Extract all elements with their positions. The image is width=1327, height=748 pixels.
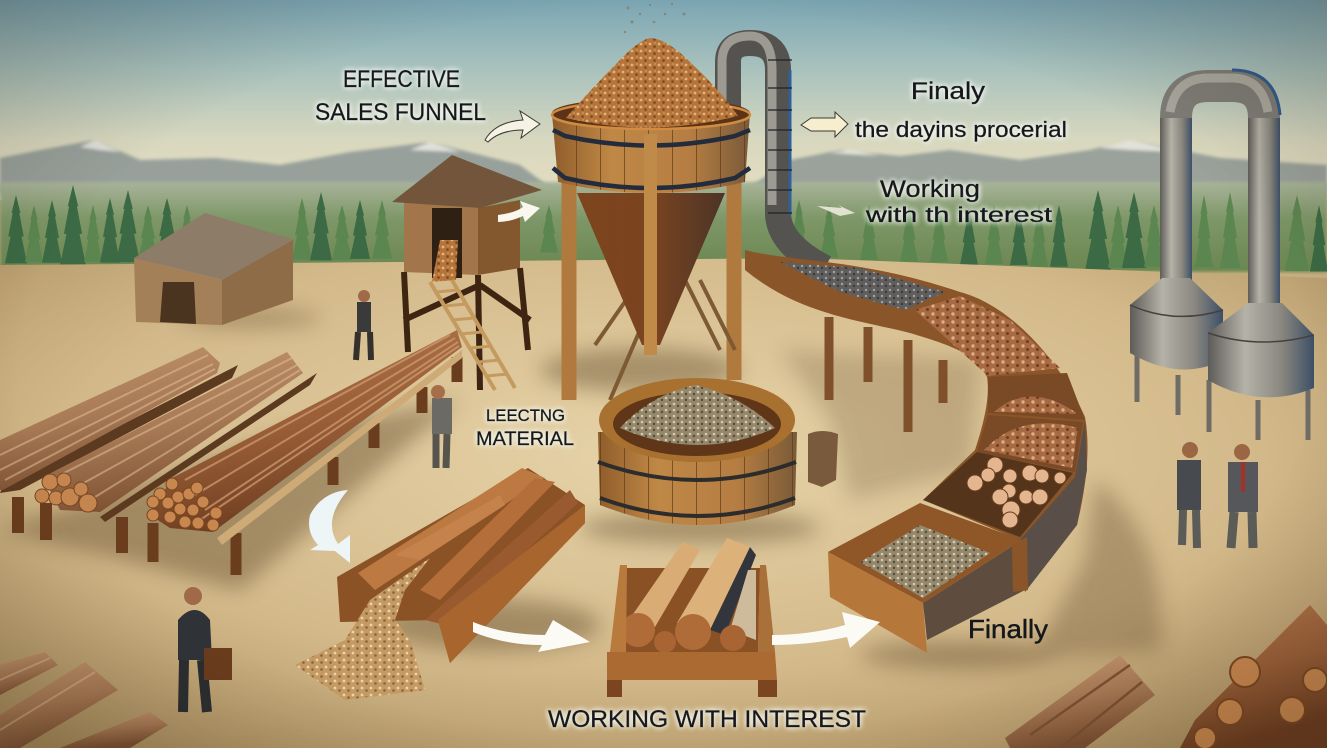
lower barrel bbox=[598, 378, 797, 525]
shed on stilts bbox=[392, 155, 542, 390]
mountains bbox=[0, 140, 1327, 200]
label: finaly: Finaly bbox=[911, 78, 985, 105]
title: effective sales funnel bbox=[315, 66, 486, 126]
lower-left log pile bbox=[0, 652, 168, 748]
arrow: working bbox=[817, 205, 855, 216]
label: working with interest upper: Working bbox=[880, 176, 980, 203]
feed pipe bbox=[722, 36, 825, 268]
ground bbox=[0, 258, 1327, 748]
central log stack bbox=[337, 468, 585, 663]
stump bbox=[808, 431, 838, 487]
label: working with interest upper bbox=[865, 176, 1052, 227]
person near ladder bbox=[356, 290, 371, 360]
arrow: shed bbox=[498, 201, 540, 222]
two people talking bbox=[1177, 442, 1258, 548]
arrow: to funnel top bbox=[485, 111, 540, 142]
falling particles bbox=[624, 3, 686, 33]
label: leecting material bbox=[476, 406, 574, 450]
chute legs bbox=[829, 317, 943, 432]
label: working with interest upper: with th interest bbox=[865, 204, 1052, 227]
log table 3 bbox=[147, 330, 462, 575]
arrow: logs to stack bbox=[309, 490, 350, 563]
ladder bbox=[430, 280, 515, 390]
log table 2 bbox=[35, 352, 317, 553]
arrow: tray to bin bbox=[772, 612, 880, 648]
label: finally: Finally bbox=[968, 614, 1048, 644]
person with briefcase bbox=[178, 587, 232, 712]
lower-right log pile bbox=[1005, 605, 1327, 748]
spilled chips bbox=[295, 558, 430, 700]
curved chute bbox=[745, 250, 1088, 592]
arrow: finaly bbox=[801, 112, 848, 137]
label: working with interest: WORKING WITH INTEREST bbox=[548, 706, 866, 733]
right steel silos bbox=[1130, 70, 1314, 440]
forest background bbox=[0, 182, 1327, 272]
title: effective sales funnel: SALES FUNNEL bbox=[315, 99, 486, 126]
label: leecting material: LEECTNG bbox=[486, 406, 565, 425]
label: the dayins procerial: the dayins procerial bbox=[855, 117, 1067, 142]
ground shadows bbox=[0, 310, 1161, 669]
arrow: stack to tray bbox=[473, 620, 590, 652]
log table 1 bbox=[0, 347, 238, 533]
main silo bbox=[552, 38, 750, 400]
barn bbox=[134, 213, 295, 325]
person by log table bbox=[431, 385, 452, 468]
title: effective sales funnel: EFFECTIVE bbox=[343, 66, 460, 93]
wood bin with gravel bbox=[828, 503, 1028, 653]
sky bbox=[0, 0, 1327, 200]
center tray with logs bbox=[607, 538, 777, 697]
label: leecting material: MATERIAL bbox=[476, 429, 574, 450]
